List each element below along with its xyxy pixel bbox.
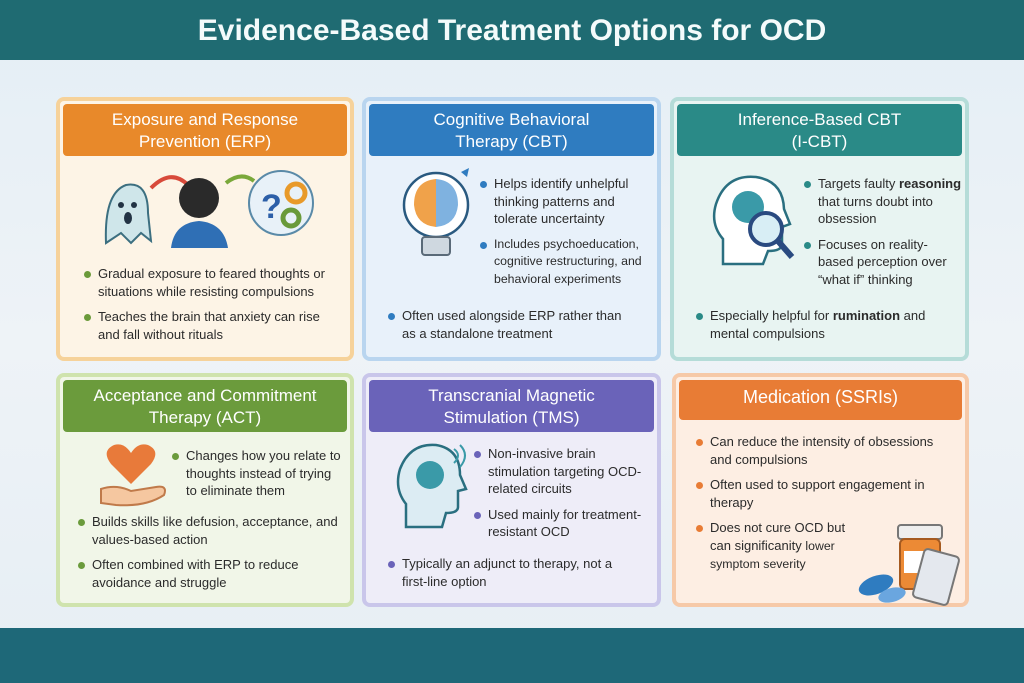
title <box>0 0 1024 60</box>
text: ERP bullets: Gradual exposure to feared thoughts or situations while resisting compulsions <box>98 266 325 298</box>
heading: ERP: Exposure and Response <box>112 110 298 129</box>
heading: CBT: Cognitive Behavioral <box>434 110 589 129</box>
icon: lightbulb brain <box>402 168 470 256</box>
icon: pill bottle and pills <box>858 524 960 606</box>
icon: ghost, person and brain: ? <box>261 188 282 226</box>
panel: ERP <box>56 97 354 361</box>
heading: ACT <box>63 380 347 432</box>
panel: CBT <box>362 97 661 361</box>
panel: ACT <box>56 373 354 607</box>
text: I-CBT bullets: Targets faulty reasoning that turns doubt into obsession <box>818 176 961 226</box>
icon: heart in hand <box>100 444 166 506</box>
heading: TMS <box>369 380 654 432</box>
icon: ghost, person and brain <box>104 170 314 248</box>
text: Medication bullets: Often used to support engagement in therapy <box>710 477 925 510</box>
text: ACT bullets lower <box>78 514 338 590</box>
heading: ERP <box>63 104 347 156</box>
text: TMS bullets: Non-invasive brain stimulation targeting OCD-related circuits <box>488 446 641 496</box>
heading: Medication <box>679 380 962 420</box>
heading: I-CBT: (I-CBT) <box>792 132 847 151</box>
panel: I-CBT <box>670 97 969 361</box>
heading: CBT <box>369 104 654 156</box>
panel: Medication <box>672 373 969 607</box>
text: Medication bullets: Can reduce the intensity of obsessions and compulsions <box>710 434 933 466</box>
text: Medication bullets <box>696 434 933 571</box>
text: CBT bullets: Includes psychoeducation, cognitive restructuring, and behavioral experiments <box>494 236 642 286</box>
text: ERP bullets: Teaches the brain that anxiety can rise and fall without rituals <box>98 309 320 342</box>
heading: Medication: Medication (SSRIs) <box>743 387 898 407</box>
text: I-CBT bullets <box>804 176 961 286</box>
text: ACT bullets: Changes how you relate to thoughts instead of trying to eliminate them <box>186 448 341 498</box>
text: I-CBT note: Especially helpful for rumination and mental compulsions <box>710 308 925 340</box>
heading: ERP: Prevention (ERP) <box>139 132 271 151</box>
text: CBT bullets <box>480 176 642 286</box>
icon: head with coil <box>396 444 468 528</box>
text: ACT bullets lower: Often combined with ERP to reduce avoidance and struggle <box>92 557 298 590</box>
icon: head with magnifier <box>712 176 794 266</box>
heading: ACT: Therapy (ACT) <box>149 408 261 427</box>
text: I-CBT bullets: Focuses on reality-based perception over “what if” thinking <box>818 236 947 286</box>
text: TMS bullets: Used mainly for treatment-resistant OCD <box>488 506 641 539</box>
panel: TMS <box>362 373 661 607</box>
heading: I-CBT: Inference-Based CBT <box>738 110 901 129</box>
text: CBT note: Often used alongside ERP rather than as a standalone treatment <box>402 308 621 340</box>
title: Evidence-Based Treatment Options for OCD <box>198 14 826 47</box>
footer band <box>0 628 1024 683</box>
text: ERP bullets <box>84 266 325 342</box>
heading: TMS: Transcranial Magnetic <box>428 386 595 405</box>
heading: TMS: Stimulation (TMS) <box>443 408 580 427</box>
heading: I-CBT <box>677 104 962 156</box>
text: TMS bullets <box>474 446 641 539</box>
heading: ACT: Acceptance and Commitment <box>94 386 316 405</box>
heading: CBT: Therapy (CBT) <box>455 132 568 151</box>
text: Medication bullets: Does not cure OCD but can significanity lower symptom severity <box>710 520 845 571</box>
text: CBT bullets: Helps identify unhelpful thinking patterns and tolerate uncertainty <box>494 176 628 226</box>
text: ACT bullets lower: Builds skills like defusion, acceptance, and values-based action <box>92 514 338 546</box>
text: TMS note: Typically an adjunct to therapy, not a first-line option <box>402 556 612 588</box>
